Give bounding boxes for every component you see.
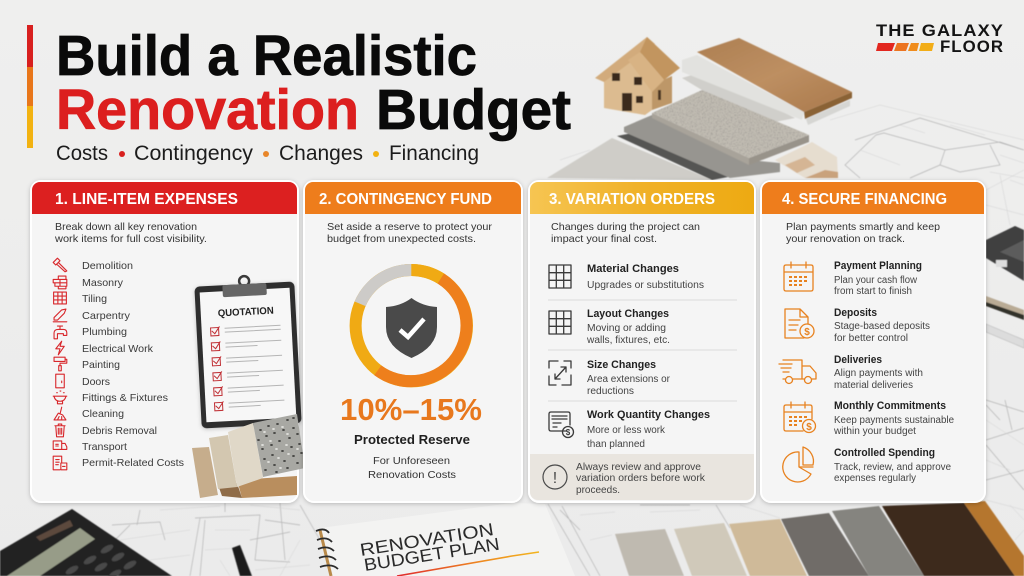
financing row: monthly commitments: within your budget	[833, 426, 916, 437]
expense list	[82, 260, 184, 469]
expense list: Electrical Work	[82, 343, 154, 355]
expense list: Demolition	[82, 260, 133, 272]
financing row: monthly commitments: Monthly Commitments	[834, 400, 946, 412]
expense list: Carpentry	[82, 310, 131, 322]
notebook title: RENOVATION	[358, 519, 495, 560]
change row: layout: Moving or adding	[587, 323, 666, 334]
icon: sink	[53, 391, 67, 404]
financing row: deposits: Stage-based deposits	[834, 321, 930, 332]
materials: house model and sample boards	[547, 37, 852, 180]
logo: The Galaxy Floor: THE GALAXY	[876, 22, 1004, 40]
white board	[682, 55, 804, 120]
financing row: payment planning: Payment Planning	[834, 260, 922, 272]
subtitle: Costs	[56, 142, 108, 165]
logo: The Galaxy Floor: FLOOR	[940, 38, 1004, 56]
panel 3 heading: 3. VARIATION ORDERS	[549, 191, 715, 208]
gable	[628, 52, 664, 92]
financing row: controlled spending: expenses regularly	[834, 473, 916, 484]
panel 4 description: your renovation on track.	[786, 233, 905, 245]
floor sample stack	[192, 414, 305, 498]
panel 3 description: Changes during the project can	[551, 221, 700, 233]
donut chart	[356, 270, 467, 381]
calculator	[0, 509, 172, 576]
financing row: monthly commitments: $	[806, 422, 812, 433]
reserve note: Renovation Costs	[368, 469, 456, 481]
panel: contingency fund	[304, 181, 522, 502]
icon: broom	[54, 407, 66, 420]
reserve label: Protected Reserve	[354, 432, 470, 447]
change row: size: Area extensions or	[587, 374, 671, 385]
change row: layout	[549, 308, 670, 346]
financing row: deposits: $	[804, 327, 810, 338]
reserve percentage: 10%–15%	[340, 392, 482, 427]
financing row: monthly commitments	[784, 400, 954, 437]
gray slab	[624, 115, 780, 178]
change row: work quantity: More or less work	[587, 425, 666, 436]
reserve note: For Unforeseen	[373, 455, 450, 467]
panel 4 description: Plan payments smartly and keep	[786, 221, 940, 233]
roof left	[595, 37, 655, 82]
pen	[232, 545, 252, 576]
financing row: payment planning	[784, 260, 922, 297]
financing row: deliveries	[779, 354, 923, 391]
clipboard: quotation: QUOTATION	[218, 306, 274, 320]
expense list: Debris Removal	[82, 425, 157, 437]
panel 4 heading: 4. SECURE FINANCING	[782, 191, 947, 208]
subtitle: Financing	[389, 142, 479, 165]
expense list: Doors	[82, 376, 110, 388]
blueprint drawings	[112, 105, 1024, 576]
change row: work quantity: than planned	[587, 439, 645, 450]
windows	[612, 73, 620, 81]
financing row: deliveries: material deliveries	[834, 380, 913, 391]
expense list: Plumbing	[82, 326, 127, 338]
notebook: renovation budget plan	[316, 503, 575, 576]
pen	[986, 296, 1024, 318]
granite slab	[652, 90, 809, 158]
change row: layout: Layout Changes	[587, 308, 669, 320]
subtitle: Changes	[279, 142, 363, 165]
review callout: Always review and approve	[576, 462, 701, 473]
icon: tiles	[54, 292, 66, 304]
under plank	[806, 100, 850, 125]
subtitle	[56, 142, 479, 165]
review callout: !	[553, 470, 557, 487]
change row: work quantity	[549, 409, 710, 450]
icon: permit document	[53, 456, 67, 470]
ruler	[986, 324, 1024, 348]
expense list: Painting	[82, 359, 120, 371]
panel 1 heading: 1. LINE-ITEM EXPENSES	[55, 191, 238, 208]
desk items on the right	[986, 226, 1024, 348]
panel: variation orders	[529, 181, 755, 502]
panel: secure financing	[761, 181, 985, 502]
panel 3 description	[551, 221, 700, 245]
panel 1 header	[32, 182, 297, 214]
dark case	[986, 226, 1024, 281]
change row: size	[549, 359, 671, 397]
review callout: variation orders before work	[576, 473, 706, 484]
icon: hammer	[53, 258, 67, 272]
wood side	[804, 92, 852, 119]
granite side	[652, 113, 749, 165]
reserve note	[368, 455, 456, 481]
subtitle: Contingency	[134, 142, 254, 165]
title accent bar	[27, 25, 33, 148]
panel 3 header	[530, 182, 754, 214]
panel 4 header	[762, 182, 984, 214]
panel 2 description	[327, 221, 493, 245]
title: Renovation	[56, 78, 359, 142]
dark slab	[617, 130, 755, 180]
icon: faucet	[54, 326, 67, 339]
financing row: deposits	[785, 307, 930, 344]
financing row: payment planning: Plan your cash flow	[834, 275, 918, 286]
logo: The Galaxy Floor	[876, 22, 1004, 56]
change row: layout: walls, fixtures, etc.	[586, 335, 670, 346]
change row: work quantity: $	[566, 428, 571, 437]
title	[56, 24, 571, 142]
spiral binding	[320, 530, 331, 576]
icon: paint roller	[54, 357, 67, 371]
financing row: deposits: Deposits	[834, 307, 877, 319]
review callout	[530, 454, 754, 500]
notebook subtitle: BUDGET PLAN	[362, 534, 501, 575]
change row: work quantity: Work Quantity Changes	[587, 409, 710, 421]
expense list: Tiling	[82, 293, 107, 305]
financing row: controlled spending: Track, review, and approve	[834, 462, 951, 473]
title: Build a Realistic	[56, 24, 477, 88]
review callout: proceeds.	[576, 485, 620, 496]
panel 2 description: Set aside a reserve to protect your	[327, 221, 493, 233]
icon: delivery truck	[53, 441, 67, 449]
panel: line-item expenses	[31, 181, 305, 502]
change row: material: Upgrades or substitutions	[587, 280, 704, 291]
concrete slab	[547, 138, 712, 180]
icon: bolt	[56, 341, 64, 355]
financing row: monthly commitments: Keep payments sustainable	[834, 415, 954, 426]
expense list: Transport	[82, 441, 127, 453]
icon: carpentry plane	[53, 309, 67, 322]
panel 2 description: budget from unexpected costs.	[327, 233, 476, 245]
expense list: Masonry	[82, 277, 124, 289]
expense list: Cleaning	[82, 408, 124, 420]
panel 2 heading: 2. CONTINGENCY FUND	[319, 191, 492, 208]
expense list: Fittings & Fixtures	[82, 392, 168, 404]
icon: bricks	[53, 276, 67, 289]
expense list: Permit-Related Costs	[82, 457, 184, 469]
change row: material: Material Changes	[587, 263, 679, 275]
financing row: deliveries: Align payments with	[834, 368, 923, 379]
flooring swatches	[615, 501, 1024, 576]
change row: size: reductions	[587, 386, 634, 397]
icon: trash can	[55, 424, 65, 437]
notebook rule	[397, 552, 539, 576]
financing row: deposits: for better control	[834, 333, 908, 344]
white board layers	[682, 72, 795, 125]
panel 1 description	[54, 221, 207, 245]
panel 3 description: impact your final cost.	[551, 233, 657, 245]
change row: material	[549, 263, 704, 291]
house side	[652, 76, 672, 110]
panel 4 description	[786, 221, 940, 245]
house front	[604, 60, 652, 115]
financing row: payment planning: from start to finish	[834, 286, 912, 297]
change row: size: Size Changes	[587, 359, 656, 371]
wood plank	[697, 38, 852, 112]
title: Budget	[376, 78, 571, 142]
financing row: controlled spending: Controlled Spending	[834, 447, 935, 459]
panel 1 description: Break down all key renovation	[55, 221, 197, 233]
panel 1 description: work items for full cost visibility.	[54, 233, 207, 245]
icon: door	[56, 374, 64, 388]
clipboard: quotation	[194, 273, 302, 429]
financing row: controlled spending	[783, 447, 951, 484]
marble samples	[775, 142, 838, 178]
panel 2 header	[305, 182, 521, 214]
icon: shield with check	[386, 298, 437, 358]
roof right	[640, 37, 680, 80]
financing row: deliveries: Deliveries	[834, 354, 882, 366]
